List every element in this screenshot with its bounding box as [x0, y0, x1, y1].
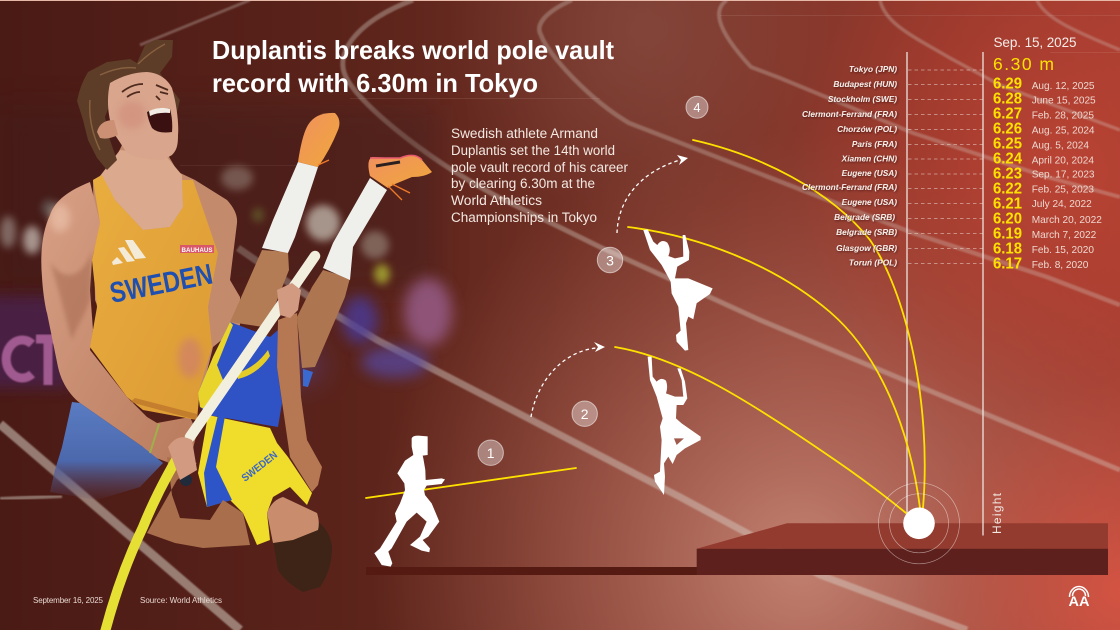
record heights: 6.26: [993, 120, 1022, 137]
orange laces: [318, 160, 410, 200]
cheek flush: [118, 101, 146, 129]
step marker 2: [572, 401, 597, 426]
blue side panel: [204, 415, 232, 507]
pole position 1: [366, 468, 576, 498]
shoe right: [368, 155, 432, 188]
face: [267, 497, 319, 543]
record heights: 6.17: [993, 255, 1022, 272]
description text: Duplantis set the 14th world: [451, 143, 615, 158]
record dates: July 24, 2022: [1032, 199, 1092, 210]
sponsor patch: BAUHAUS: [182, 247, 213, 254]
record heights: 6.20: [993, 210, 1022, 227]
pole position 4: [693, 140, 925, 508]
planting point with rings: [878, 483, 960, 564]
venue labels: Glasgow (GBR): [836, 243, 897, 253]
vest pink reflection: [178, 338, 202, 378]
record dates: [1032, 81, 1102, 271]
footer source: Source: World Athletics: [140, 596, 222, 605]
venue labels: Belgrade (SRB): [834, 212, 895, 222]
record heights: 6.22: [993, 180, 1022, 197]
description text: Swedish athlete Armand: [451, 126, 598, 141]
hair strands: [90, 44, 165, 150]
torso and neck skin: [93, 145, 240, 400]
shoe logo mark: [376, 162, 400, 166]
venue labels: Chorzów (POL): [837, 124, 897, 134]
description text: Championships in Tokyo: [451, 210, 597, 225]
record heights: 6.29: [993, 75, 1022, 92]
leg left: [230, 250, 289, 328]
record dates: Aug. 12, 2025: [1032, 81, 1095, 92]
record dates: Sep. 17, 2023: [1032, 170, 1095, 180]
venue labels: Budapest (HUN): [833, 79, 897, 89]
Anadolu Agency logo: [1068, 586, 1090, 609]
record heights: 6.27: [993, 105, 1022, 122]
record dates: Aug. 25, 2024: [1032, 126, 1095, 136]
step marker 3: [597, 247, 623, 273]
record dates: March 7, 2022: [1032, 230, 1097, 241]
shoulder highlight: [50, 204, 70, 232]
title: [212, 35, 614, 98]
wristband: [150, 424, 159, 453]
chest skin: [100, 150, 183, 230]
height scale lines: [907, 52, 983, 536]
record table: [802, 35, 1102, 272]
teeth: [149, 108, 170, 116]
photo: Duplantis celebrating in Sweden vest: [41, 40, 240, 500]
venue labels: Clermont-Ferrand (FRA): [802, 109, 897, 119]
pole position 3: [628, 227, 920, 508]
SWEDEN on singlet: SWEDEN: [239, 449, 280, 484]
raised arm: [277, 313, 322, 492]
yellow singlet: [198, 415, 312, 545]
description text: [451, 126, 628, 225]
silhouette: vaulter hanging on bending pole: [648, 357, 701, 495]
sock left: [262, 162, 318, 253]
watch: [180, 474, 192, 486]
record dates: Feb. 15, 2020: [1032, 245, 1094, 256]
footer date: September 16, 2025: [33, 596, 104, 605]
venue labels: Tokyo (JPN): [849, 64, 897, 74]
description text: World Athletics: [451, 193, 542, 208]
record heights: 6.18: [993, 240, 1022, 257]
hair: [77, 40, 180, 170]
face: [108, 72, 178, 160]
sock right: [323, 178, 387, 280]
record dates: March 20, 2022: [1032, 215, 1102, 226]
pole white section: [190, 256, 315, 437]
arm muscle shadow: [50, 250, 92, 340]
landing platform: [697, 523, 1108, 575]
leader lines: [908, 70, 983, 264]
shorts: [50, 402, 163, 500]
latest record heading: Sep. 15, 2025: [994, 35, 1076, 50]
record heights: 6.19: [993, 225, 1022, 242]
venue labels: Xiamen (CHN): [841, 154, 897, 164]
record dates: Feb. 25, 2023: [1032, 184, 1094, 196]
blue wrist band: [303, 369, 313, 387]
runway: [366, 567, 697, 575]
dashed arrow from step 3 to step 4: [617, 155, 688, 233]
SWEDEN on vest: SWEDEN: [107, 259, 215, 310]
pink stadium signage fragments: [6, 339, 60, 385]
record dates: April 20, 2024: [1032, 156, 1094, 166]
venue labels: Toruń (POL): [849, 258, 897, 268]
blue shorts: [198, 322, 282, 427]
shoe top pink edge: [370, 155, 422, 160]
pole trajectories: [366, 140, 925, 513]
pole position 2: [615, 347, 906, 513]
description text: pole vault record of his career: [451, 160, 628, 175]
step marker 4: 4: [693, 100, 701, 115]
record dates: Feb. 28, 2025: [1032, 110, 1094, 122]
leg right: [297, 270, 350, 368]
venue labels: Eugene (USA): [842, 168, 897, 178]
record dates: June 15, 2025: [1032, 96, 1096, 106]
yellow shorts panel: [198, 322, 233, 412]
step marker 1: 1: [487, 445, 495, 461]
shoe left: [298, 113, 339, 167]
lower arm: [147, 457, 250, 548]
record dates: Aug. 5, 2024: [1032, 140, 1089, 152]
ear: [97, 120, 118, 139]
left arm: [41, 182, 197, 462]
record heights: 6.28: [993, 90, 1022, 107]
gripping hands: [168, 283, 301, 480]
title: Duplantis breaks world pole vault: [212, 35, 614, 65]
venue labels: Belgrade (SRB): [836, 227, 897, 237]
step marker 2: 2: [581, 406, 589, 422]
record heights: 6.23: [993, 165, 1022, 182]
latest record value: 6.30 m: [993, 54, 1054, 74]
record heights: 6.24: [993, 150, 1022, 167]
silhouette: runner: [374, 436, 445, 567]
silhouette: vaulter rising on pole: [643, 229, 713, 351]
blurred stadium crowd: [0, 105, 452, 388]
venue labels: Stockholm (SWE): [828, 94, 897, 104]
venue labels: Paris (FRA): [852, 139, 897, 149]
venue labels: Clermont-Ferrand (FRA): [802, 182, 897, 192]
record heights: [993, 75, 1022, 272]
step marker 4: [686, 96, 708, 118]
venue labels: [802, 64, 897, 268]
height axis label: Height: [990, 492, 1004, 534]
head hair: [273, 520, 332, 592]
Anadolu Agency logo: AA: [1068, 593, 1090, 609]
dashed arrow from step 1 to step 2: [531, 342, 605, 417]
pole yellow section: [105, 440, 188, 630]
open mouth: [147, 108, 172, 132]
step marker 3: 3: [606, 252, 614, 268]
closed eyes and brows: [122, 84, 168, 100]
adidas logo: [112, 240, 146, 265]
record heights: 6.21: [993, 195, 1022, 212]
title: record with 6.30m in Tokyo: [212, 68, 538, 98]
vest hem shade: [130, 398, 197, 420]
photo: Duplantis inverted clearing the bar: [105, 113, 432, 630]
vest: [90, 175, 218, 420]
step marker 1: [478, 440, 503, 465]
record heights: 6.25: [993, 135, 1022, 152]
record dates: Feb. 8, 2020: [1032, 260, 1089, 271]
yellow shorts stripe: [237, 350, 270, 379]
description text: by clearing 6.30m at the: [451, 176, 595, 191]
venue labels: Eugene (USA): [842, 197, 897, 207]
